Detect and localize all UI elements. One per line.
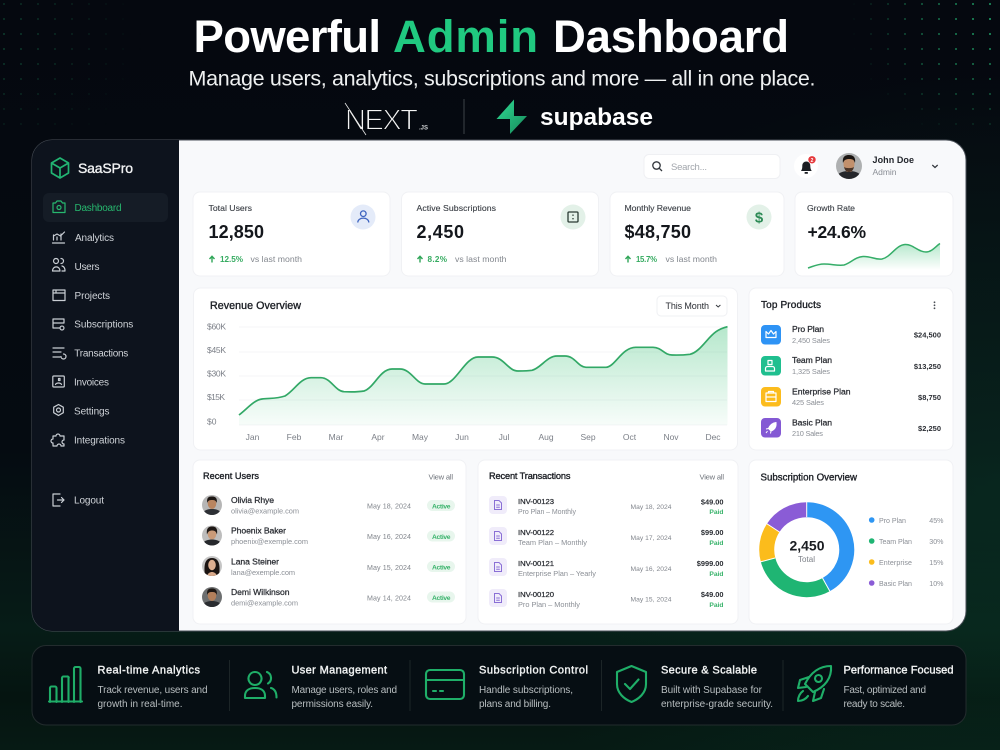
legend: Enterprise bbox=[879, 559, 912, 567]
area chart: Mar bbox=[329, 432, 343, 442]
transaction: INV-00120 bbox=[489, 589, 724, 609]
product: Enterprise Plan: $8,750 bbox=[918, 393, 941, 402]
legend bbox=[869, 517, 944, 588]
panel: Recent Transactions: Recent Transactions bbox=[489, 471, 571, 481]
transaction: INV-00121: Enterprise Plan – Yearly bbox=[518, 569, 596, 578]
panel: Subscription Overview: Subscription Overview bbox=[760, 472, 858, 484]
nav: Invoices: Invoices bbox=[74, 377, 109, 388]
product: Team Plan: 1,325 Sales bbox=[792, 367, 830, 376]
card: Total Users: 12,850 bbox=[208, 222, 264, 242]
nav: Subscriptions: Subscriptions bbox=[74, 319, 133, 330]
user row: Lana Steiner: lana@exemple.com bbox=[231, 568, 295, 577]
user row: Phoenix Baker bbox=[202, 526, 455, 546]
area chart: $0 bbox=[207, 416, 217, 426]
feature: Real-time Analytics: Track revenue, users and bbox=[98, 685, 208, 696]
area chart: $15K bbox=[207, 392, 225, 402]
feature: Performance Focused: Fast, optimized and bbox=[844, 685, 926, 696]
panel: Recent Transactions bbox=[478, 460, 738, 624]
card: Active Subscriptions: Active Subscriptions bbox=[416, 203, 497, 213]
user row: Olivia Rhye: olivia@example.com bbox=[231, 506, 299, 516]
feature: User Management: permissions easily. bbox=[292, 699, 373, 710]
product: Basic Plan: 210 Sales bbox=[792, 429, 823, 438]
card: Monthly Revenue: vs last month bbox=[666, 254, 717, 264]
feature: Subscription Control: Handle subscriptions, bbox=[479, 685, 573, 696]
area chart: Apr bbox=[371, 432, 385, 442]
sparkline bbox=[808, 244, 940, 270]
feature: Subscription Control: plans and billing. bbox=[479, 699, 551, 710]
donut chart: Total bbox=[798, 555, 815, 564]
transaction: INV-00122: Paid bbox=[709, 540, 724, 547]
user row: Olivia Rhye: Olivia Rhye bbox=[231, 495, 274, 505]
feature: Real-time Analytics: Real-time Analytics bbox=[98, 664, 200, 676]
icon: notification bell: 2 bbox=[811, 158, 814, 164]
product: Pro Plan bbox=[761, 324, 941, 345]
area chart: Jul bbox=[499, 432, 510, 442]
card: Monthly Revenue bbox=[610, 192, 784, 276]
area chart: Sep bbox=[580, 432, 596, 442]
icon: subscription bbox=[560, 204, 586, 230]
card: Monthly Revenue: $48,750 bbox=[624, 222, 691, 242]
feature: Performance Focused: Performance Focused bbox=[844, 664, 954, 676]
transaction: INV-00121 bbox=[489, 558, 724, 578]
nav: Logout bbox=[53, 494, 104, 506]
icon: dollar: $ bbox=[755, 210, 764, 226]
sidebar bbox=[32, 140, 179, 631]
legend: 45% bbox=[929, 517, 944, 525]
nav: Logout: Logout bbox=[74, 496, 104, 506]
donut chart bbox=[760, 502, 847, 592]
nav: Invoices bbox=[53, 376, 109, 388]
legend: 15% bbox=[929, 559, 944, 567]
user row: Demi Wilkinson: May 14, 2024 bbox=[367, 594, 411, 602]
nav: Dashboard (active) bbox=[43, 193, 168, 222]
card: Active Subscriptions bbox=[402, 192, 598, 276]
title bbox=[194, 11, 789, 62]
product: Team Plan: Team Plan bbox=[792, 355, 832, 365]
product: Enterprise Plan bbox=[761, 386, 941, 407]
feature: User Management: User Management bbox=[292, 664, 387, 676]
product: Enterprise Plan: Enterprise Plan bbox=[792, 386, 851, 396]
transaction: INV-00123: Pro Plan – Monthly bbox=[518, 509, 576, 516]
panel: Top Products bbox=[749, 288, 953, 450]
icon: bar chart bbox=[49, 667, 82, 702]
transaction: INV-00120: Paid bbox=[709, 602, 724, 609]
logo divider bbox=[463, 99, 465, 134]
menu dots bbox=[934, 301, 935, 309]
transaction: INV-00121: Paid bbox=[709, 571, 724, 578]
brand: SaaSPro: SaaSPro bbox=[78, 160, 133, 176]
product: Basic Plan bbox=[761, 418, 941, 438]
area chart: Jun bbox=[455, 432, 469, 442]
logo: Next.js: NEXT bbox=[345, 104, 418, 136]
area chart bbox=[207, 322, 728, 442]
card: Active Subscriptions: 8.2% bbox=[428, 255, 448, 264]
dropdown: This Month bbox=[657, 296, 727, 316]
transaction: INV-00122: Team Plan – Monthly bbox=[518, 538, 587, 547]
panel: feature strip bbox=[32, 646, 966, 725]
nav: Settings bbox=[54, 404, 110, 417]
panel: Subscription Overview bbox=[749, 460, 953, 624]
panel: Revenue Overview bbox=[194, 288, 738, 450]
transaction: INV-00120: INV-00120 bbox=[518, 590, 554, 599]
icon: shield bbox=[617, 666, 646, 702]
transaction: INV-00123: May 18, 2024 bbox=[630, 504, 672, 511]
area chart: $30K bbox=[207, 368, 226, 378]
panel: Recent Users: View all bbox=[428, 472, 453, 482]
card: Active Subscriptions: 2,450 bbox=[416, 222, 464, 242]
transaction: INV-00123: $49.00 bbox=[701, 498, 724, 506]
transaction: INV-00123 bbox=[489, 496, 724, 516]
user row: Demi Wilkinson bbox=[202, 587, 455, 608]
logo: Next.js: .JS bbox=[419, 126, 428, 132]
user row: Olivia Rhye bbox=[202, 495, 455, 516]
nav: Integrations: Integrations bbox=[74, 436, 125, 446]
product: Basic Plan: $2,250 bbox=[918, 424, 941, 433]
nav: Settings: Settings bbox=[74, 406, 110, 417]
area chart: Oct bbox=[623, 432, 637, 442]
area chart: Feb bbox=[287, 432, 302, 442]
area chart: May bbox=[412, 432, 429, 442]
title: Powerful bbox=[194, 11, 381, 62]
card: Monthly Revenue: 15.7% bbox=[636, 255, 657, 264]
card: Total Users: vs last month bbox=[250, 254, 302, 264]
feature: Subscription Control bbox=[426, 664, 588, 710]
transaction: INV-00123: Paid bbox=[709, 509, 724, 516]
transaction: INV-00122: May 17, 2024 bbox=[630, 535, 672, 542]
card: Total Users: Total Users bbox=[208, 203, 253, 213]
user name bbox=[872, 155, 938, 177]
title: Admin bbox=[393, 11, 538, 62]
header: search box bbox=[644, 154, 780, 178]
nav: Analytics bbox=[52, 232, 114, 244]
area chart: Nov bbox=[663, 432, 679, 442]
user name: Admin bbox=[872, 167, 897, 177]
transaction: INV-00122: $99.00 bbox=[701, 528, 724, 537]
user name: John Doe bbox=[872, 155, 914, 165]
area chart: $60K bbox=[207, 322, 226, 332]
transaction: INV-00120: $49.00 bbox=[701, 590, 724, 599]
transaction: INV-00121: May 16, 2024 bbox=[630, 566, 672, 573]
product: Enterprise Plan: 425 Sales bbox=[792, 398, 824, 407]
user row: Demi Wilkinson: Demi Wilkinson bbox=[231, 587, 290, 597]
card: Total Users: 12.5% bbox=[220, 255, 244, 264]
feature: User Management: Manage users, roles and bbox=[292, 685, 397, 696]
user row: Lana Steiner: Active bbox=[432, 564, 451, 571]
card: Growth Rate: Growth Rate bbox=[807, 203, 855, 213]
legend: Basic Plan bbox=[879, 580, 912, 588]
panel: Recent Users: Recent Users bbox=[203, 471, 259, 481]
user row: Phoenix Baker: Active bbox=[432, 534, 451, 541]
icon: dollar bbox=[746, 204, 772, 230]
area chart: Aug bbox=[538, 432, 554, 442]
panel: Top Products: Top Products bbox=[761, 300, 821, 311]
feature: Real-time Analytics: growth in real-time. bbox=[98, 699, 182, 710]
feature: Performance Focused: ready to scale. bbox=[844, 699, 905, 710]
feature: Subscription Control: Subscription Control bbox=[479, 664, 588, 676]
user row: Olivia Rhye: May 18, 2024 bbox=[367, 502, 411, 510]
nav: Analytics: Analytics bbox=[75, 233, 114, 244]
card: Monthly Revenue: Monthly Revenue bbox=[624, 203, 691, 213]
icon: credit card bbox=[426, 670, 464, 699]
brand: SaaSPro bbox=[52, 158, 133, 178]
transaction: INV-00122: INV-00122 bbox=[518, 528, 554, 537]
feature: Performance Focused bbox=[798, 664, 954, 710]
card: Active Subscriptions: vs last month bbox=[455, 254, 507, 264]
transaction: INV-00120: Pro Plan – Monthly bbox=[518, 600, 580, 609]
user row: Phoenix Baker: phoenix@exemple.com bbox=[231, 537, 308, 546]
transaction: INV-00120: May 15, 2024 bbox=[630, 596, 672, 604]
product: Pro Plan: 2,450 Sales bbox=[792, 336, 830, 345]
nav: Dashboard (active): Dashboard bbox=[74, 203, 122, 214]
nav: Transactions: Transactions bbox=[74, 348, 128, 359]
legend: Team Plan bbox=[879, 538, 912, 546]
donut chart: 2,450 bbox=[790, 538, 825, 554]
nav: Users: Users bbox=[74, 262, 100, 273]
legend: Pro Plan bbox=[879, 517, 906, 525]
nav: Projects: Projects bbox=[74, 291, 110, 302]
panel: dashboard window bbox=[32, 140, 966, 631]
card: Growth Rate: +24.6% bbox=[808, 222, 866, 242]
user row: Demi Wilkinson: demi@example.com bbox=[231, 598, 298, 608]
icon: rocket bbox=[798, 666, 831, 701]
product: Pro Plan: $24,500 bbox=[914, 330, 941, 340]
area chart: $45K bbox=[207, 345, 226, 355]
panel: Recent Transactions: View all bbox=[700, 472, 724, 482]
panel: Recent Users bbox=[202, 472, 455, 607]
area chart: Jan bbox=[246, 432, 260, 442]
feature: Secure & Scalable: enterprise-grade security. bbox=[661, 699, 773, 710]
nav: Transactions bbox=[53, 348, 128, 359]
feature: User Management bbox=[245, 664, 397, 710]
nav: Users bbox=[52, 258, 100, 273]
transaction: INV-00122 bbox=[489, 527, 724, 547]
icon: users bbox=[245, 672, 276, 698]
subtitle: Manage users, analytics, subscriptions and more — all in one place. bbox=[188, 66, 816, 90]
area chart: Dec bbox=[705, 432, 721, 442]
user row: Lana Steiner bbox=[202, 556, 455, 577]
logo: Supabase bbox=[496, 100, 653, 134]
feature: Secure & Scalable bbox=[617, 664, 773, 710]
card: Total Users bbox=[193, 192, 390, 276]
feature: Real-time Analytics bbox=[49, 664, 208, 710]
icon: user bbox=[350, 204, 376, 230]
transaction: INV-00121: $999.00 bbox=[697, 559, 724, 568]
transaction: INV-00121: INV-00121 bbox=[518, 559, 554, 568]
card: Growth Rate bbox=[795, 192, 953, 276]
nav: Integrations bbox=[51, 434, 125, 446]
legend: 10% bbox=[929, 580, 944, 588]
transaction: INV-00123: INV-00123 bbox=[518, 497, 554, 506]
dropdown: This Month: This Month bbox=[666, 301, 709, 311]
user row: Phoenix Baker: Phoenix Baker bbox=[231, 526, 286, 536]
logo: Supabase: supabase bbox=[540, 104, 653, 131]
user row: Lana Steiner: Lana Steiner bbox=[231, 556, 279, 566]
user row: Olivia Rhye: Active bbox=[432, 503, 451, 510]
avatar: John Doe bbox=[836, 153, 862, 179]
icon: notification bell bbox=[794, 154, 818, 178]
product: Team Plan: $13,250 bbox=[914, 362, 941, 371]
legend: 30% bbox=[929, 538, 944, 546]
user row: Phoenix Baker: May 16, 2024 bbox=[367, 533, 411, 541]
user row: Demi Wilkinson: Active bbox=[432, 595, 451, 602]
panel: Revenue Overview: Revenue Overview bbox=[210, 300, 301, 312]
product: Basic Plan: Basic Plan bbox=[792, 418, 832, 428]
nav: Projects bbox=[53, 290, 110, 302]
product: Pro Plan: Pro Plan bbox=[792, 324, 824, 334]
title: Dashboard bbox=[553, 11, 789, 62]
product: Team Plan bbox=[761, 355, 941, 376]
feature: Secure & Scalable: Secure & Scalable bbox=[661, 664, 757, 676]
user row: Lana Steiner: May 15, 2024 bbox=[367, 564, 411, 572]
header: search box: Search... bbox=[671, 162, 707, 173]
feature: Secure & Scalable: Built with Supabase for bbox=[661, 685, 763, 696]
